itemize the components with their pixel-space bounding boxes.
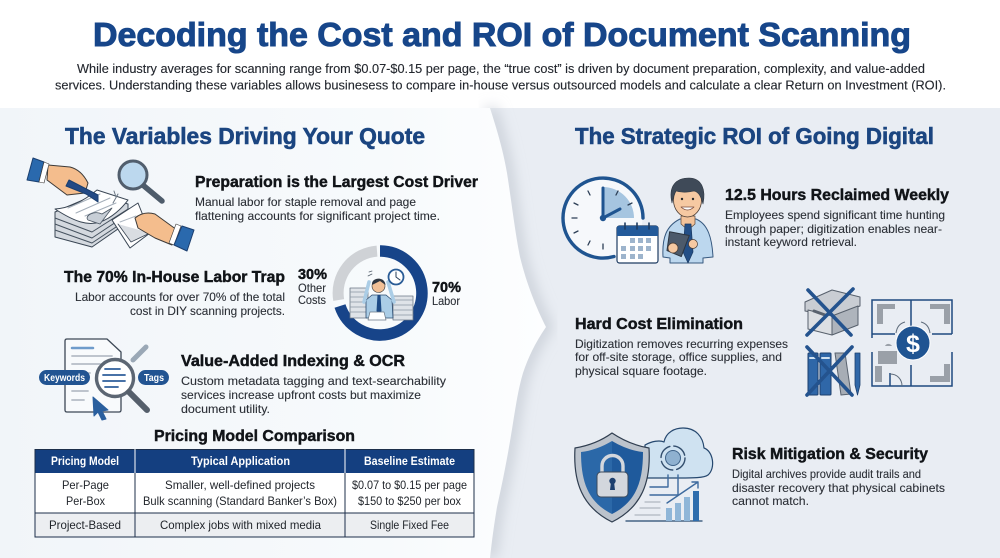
block: hours reclaimed: 12.5 Hours Reclaimed Weekly	[725, 187, 949, 204]
table header: Pricing Model	[51, 456, 119, 468]
icon: crossed-out storage box	[805, 289, 860, 335]
table row: per-page and per-box: Smaller, well-defined projects	[165, 478, 315, 492]
icon: shield with padlock	[575, 433, 649, 522]
block: hours reclaimed	[725, 187, 949, 249]
block: indexing and OCR: services increase upfront costs but maximize	[181, 388, 421, 402]
chart label: 30% other costs: 30%	[298, 267, 327, 283]
block: labor trap	[64, 269, 285, 318]
donut chart: 70% labor, 30% other	[338, 251, 422, 335]
table row: project-based	[49, 518, 449, 532]
block: risk mitigation: cannot match.	[732, 494, 809, 508]
block: indexing and OCR: Value-Added Indexing & OCR	[181, 353, 405, 370]
block: preparation	[195, 174, 478, 223]
intro text: services. Understanding these variables allows businesess to compare in-house versus outsourced models and calculate a clear Return on Investment (ROI).	[55, 78, 946, 92]
keywords pill: Keywords	[44, 373, 85, 384]
block: risk mitigation: Risk Mitigation & Security	[732, 446, 928, 463]
icon: cloud, sync and growth chart	[626, 428, 713, 521]
table header: Baseline Estimate	[364, 456, 455, 468]
icon: floor plan with dollar: $	[906, 330, 920, 358]
table header: Typical Application	[191, 456, 290, 468]
table row: per-page and per-box: $0.07 to $0.15 per page	[352, 478, 467, 492]
block: preparation: Manual labor for staple removal and page	[195, 195, 416, 209]
chart label: 30% other costs: Other	[298, 281, 326, 295]
icon: crossed-out binders and pen	[807, 347, 860, 395]
table heading: Pricing Model Comparison	[154, 428, 355, 445]
pricing table	[35, 449, 474, 537]
block: hard cost elimination: Hard Cost Elimination	[575, 316, 743, 333]
left heading: The Variables Driving Your Quote	[65, 123, 425, 149]
tags pill: Tags	[144, 373, 164, 384]
intro text: While industry averages for scanning range from $0.07-$0.15 per page, the “true cost” is driven by document preparation, complexity, and value-added	[77, 61, 925, 76]
block: labor trap: cost in DIY scanning projects.	[130, 304, 285, 318]
table row: project-based: Single Fixed Fee	[370, 518, 449, 532]
background: left panel	[0, 108, 546, 558]
table row: per-page and per-box: Per-Page	[62, 478, 109, 492]
icon: hands preparing paper stack	[27, 158, 194, 251]
chart label: 70% labor: 70%	[432, 280, 461, 296]
block: indexing and OCR	[181, 353, 446, 416]
block: labor trap: The 70% In-House Labor Trap	[64, 269, 285, 286]
block: preparation: flattening accounts for significant project time.	[195, 209, 440, 223]
block: hours reclaimed: through paper; digitization enables near-	[725, 222, 942, 236]
title: Decoding the Cost and ROI of Document Scanning	[93, 17, 911, 54]
block: risk mitigation	[732, 446, 945, 508]
icon: clock and calendar	[563, 178, 658, 263]
icon: stressed worker	[350, 270, 413, 320]
chart label: 30% other costs	[298, 267, 327, 307]
block: risk mitigation: Digital archives provide audit trails and	[732, 467, 921, 481]
block: hard cost elimination	[575, 316, 788, 378]
chart label: 70% labor: Labor	[432, 294, 460, 308]
block: preparation: Preparation is the Largest Cost Driver	[195, 174, 478, 191]
table row: per-page and per-box: Per-Box	[66, 494, 105, 508]
block: hours reclaimed: Employees spend significant time hunting	[725, 208, 945, 222]
block: indexing and OCR: document utility.	[181, 402, 270, 416]
chart label: 70% labor	[432, 280, 461, 308]
block: hard cost elimination: physical square footage.	[575, 364, 707, 378]
calendar	[617, 223, 658, 263]
table row: per-page and per-box	[62, 478, 467, 508]
icon: floor plan with dollar	[872, 300, 952, 386]
icon: employee with tablet	[663, 178, 713, 263]
block: hard cost elimination: Digitization removes recurring expenses	[575, 337, 788, 351]
icon: chain link	[133, 347, 146, 360]
block: hours reclaimed: instant keyword retrieval.	[725, 235, 857, 249]
block: hard cost elimination: for off-site storage, office supplies, and	[575, 350, 782, 364]
table row: project-based: Project-Based	[49, 518, 121, 532]
block: labor trap: Labor accounts for over 70% of the total	[75, 290, 285, 304]
chart label: 30% other costs: Costs	[298, 293, 326, 307]
icon: cursor	[93, 397, 108, 420]
table row: per-page and per-box: Bulk scanning (Standard Banker’s Box)	[143, 494, 337, 508]
panel edge shadow	[490, 108, 546, 558]
table row: per-page and per-box: $150 to $250 per box	[358, 494, 461, 508]
block: indexing and OCR: Custom metadata tagging and text-searchability	[181, 374, 446, 388]
table header	[51, 456, 455, 468]
block: risk mitigation: disaster recovery that physical cabinets	[732, 481, 945, 495]
right heading: The Strategic ROI of Going Digital	[575, 123, 934, 149]
intro text	[55, 61, 946, 92]
table row: project-based: Complex jobs with mixed media	[160, 518, 321, 532]
icon: document, magnifier and tags	[39, 339, 169, 420]
